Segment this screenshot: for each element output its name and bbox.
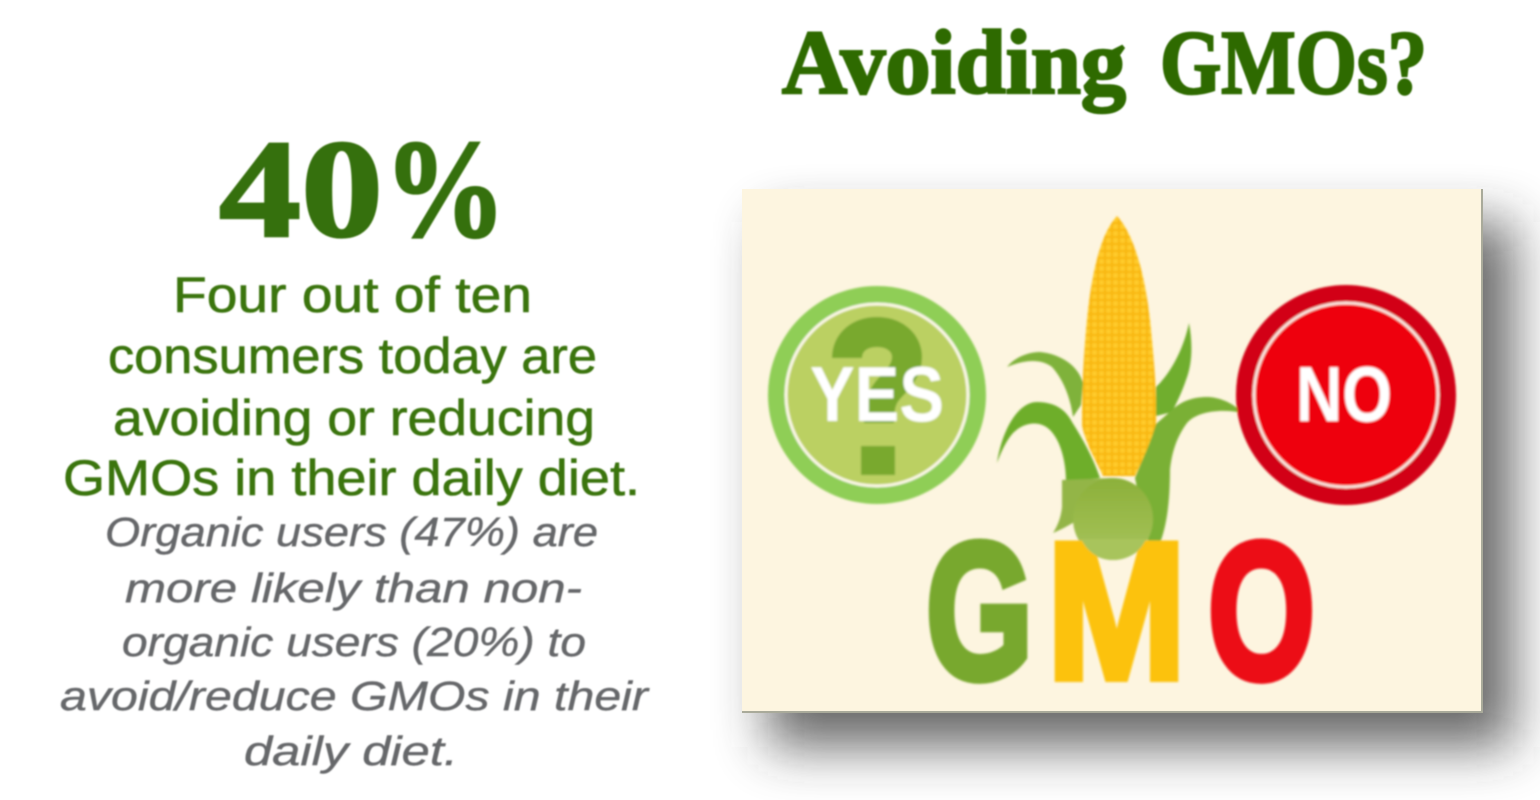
title	[782, 12, 1427, 113]
big stat: 40%: 40	[219, 112, 383, 267]
icon: NO badge	[1236, 285, 1456, 505]
title: GMOs?	[1160, 12, 1427, 113]
husk base over wordmark	[1081, 539, 1146, 560]
text block: main finding: consumers today are	[108, 328, 597, 384]
icon: YES badge: YES	[810, 350, 944, 438]
GMO picture panel	[742, 189, 1483, 720]
text block: organic users comparison: organic users (20%) to	[122, 619, 586, 665]
text block: organic users comparison: Organic users (47%) are	[105, 509, 598, 555]
panel shadow	[768, 222, 1513, 747]
text block: organic users comparison: avoid/reduce GMOs in their	[60, 673, 651, 719]
text block: organic users comparison: daily diet.	[244, 728, 458, 774]
GMO wordmark: M	[1047, 503, 1186, 720]
icon: YES badge	[768, 286, 986, 504]
icon: corn cob	[997, 216, 1243, 560]
text block: organic users comparison: more likely than non-	[125, 565, 582, 611]
icon: NO badge: NO	[1296, 350, 1392, 438]
text block: organic users comparison	[60, 509, 651, 774]
text block: main finding: Four out of ten	[173, 267, 532, 323]
big stat: 40%	[219, 112, 506, 267]
GMO wordmark	[926, 503, 1315, 720]
title: Avoiding	[782, 12, 1126, 113]
big stat: 40%: %	[384, 112, 506, 267]
text block: main finding: GMOs in their daily diet.	[63, 450, 640, 506]
text block: main finding	[63, 267, 640, 506]
GMO wordmark: O	[1208, 503, 1315, 720]
GMO wordmark: G	[926, 503, 1033, 720]
text block: main finding: avoiding or reducing	[113, 390, 595, 446]
